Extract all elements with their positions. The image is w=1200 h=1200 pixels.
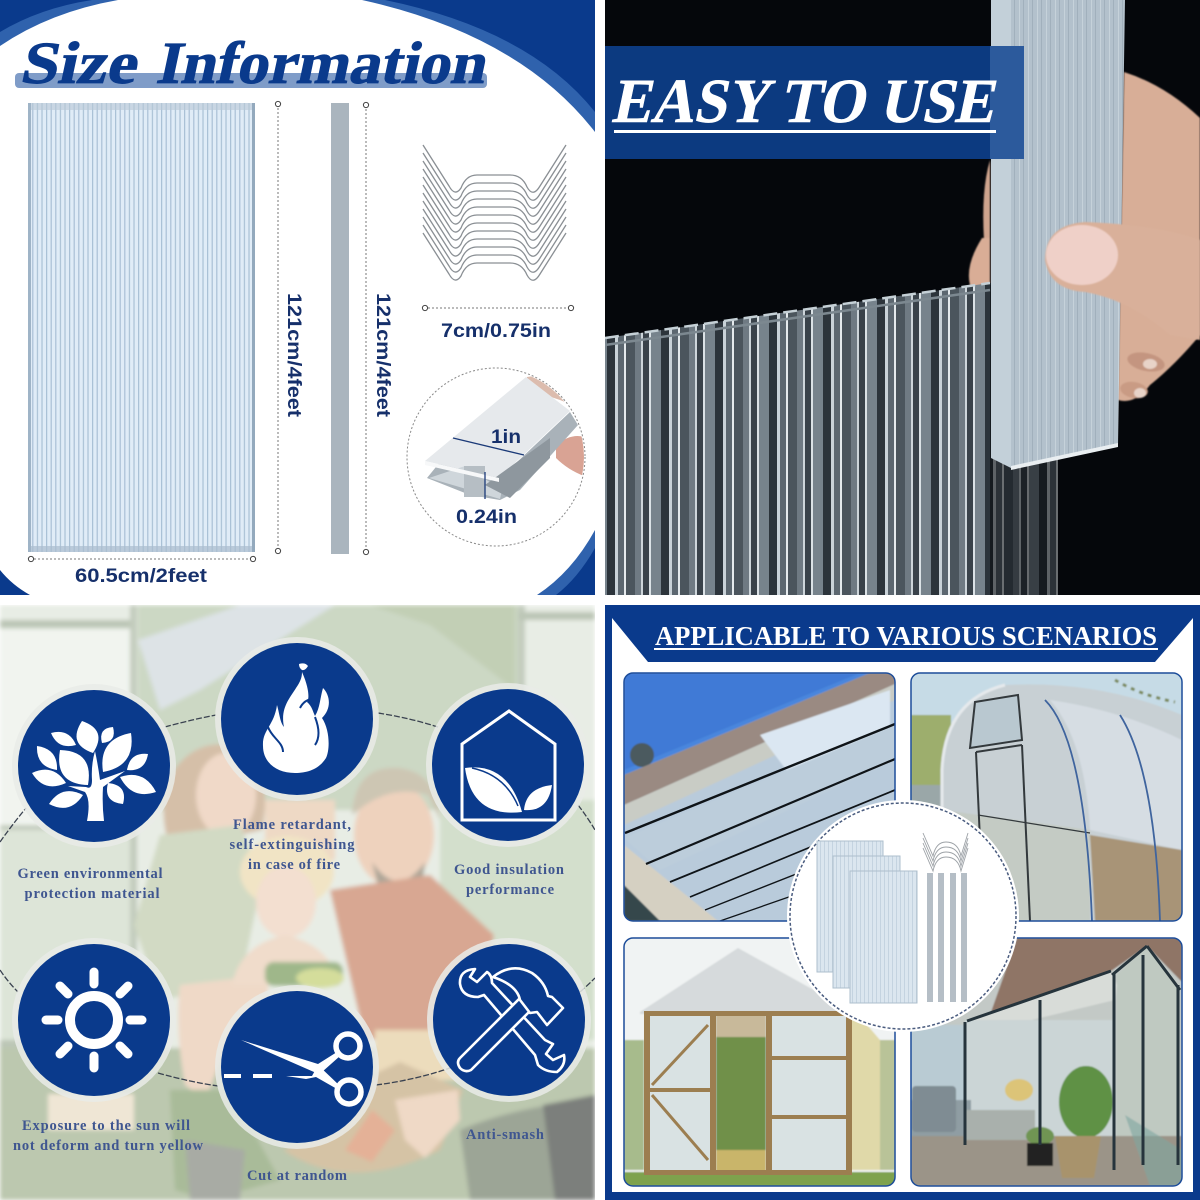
photo: glass conservatory <box>911 938 1182 1186</box>
basket and legs <box>283 1062 463 1172</box>
dimension: sheet width <box>28 556 256 582</box>
heading: Size Information: Size <box>16 31 146 97</box>
four strips <box>927 873 967 1002</box>
H-profile connector strip <box>331 103 349 554</box>
label: flame retardant: Flame retardant, <box>233 817 351 833</box>
label: anti-smash: Anti-smash <box>466 1127 544 1143</box>
photo: roof panels <box>624 673 895 921</box>
corner decoration: bottom left <box>0 570 30 595</box>
dimension: sheet height <box>275 101 304 554</box>
child <box>238 838 335 900</box>
polycarbonate sheet <box>28 103 255 552</box>
icon: hammer and wrench <box>427 938 591 1102</box>
label: green material: Green environmental <box>18 866 162 882</box>
banner: easy to use <box>605 46 1024 159</box>
center circle: product kit <box>787 800 1019 1032</box>
detail circle: connector profile <box>407 368 590 546</box>
dimension: strip height <box>363 102 393 555</box>
panel: easy to use <box>605 0 1200 595</box>
dimension: clip width: 7cm/0.75in <box>441 321 551 342</box>
icon: greenhouse with leaves <box>426 683 590 847</box>
connector dashes <box>0 713 595 1086</box>
panel: applicable scenarios <box>605 605 1200 1200</box>
label: sun resistance: Exposure to the sun will <box>22 1118 190 1134</box>
photo: family in greenhouse <box>0 605 595 1200</box>
mini wire clips <box>923 833 968 871</box>
woman <box>163 744 265 850</box>
label: green material: protection material <box>24 886 160 902</box>
label: insulation: Good insulation <box>454 862 564 878</box>
aluminium H-strip <box>991 0 1125 470</box>
detail circle: connector profile: 1in <box>491 427 521 448</box>
hand <box>969 72 1200 401</box>
photo: arched polytunnel <box>911 673 1182 921</box>
dimension: clip width <box>422 305 574 342</box>
label: insulation: performance <box>466 882 555 898</box>
panel: size information <box>0 0 595 595</box>
corner decoration: top right <box>362 0 595 132</box>
label: cut at random: Cut at random <box>247 1168 347 1184</box>
detail circle: connector profile: 0.24in <box>456 507 517 528</box>
man <box>354 783 434 887</box>
label: flame retardant: in case of fire <box>248 857 341 873</box>
icon: scissors <box>215 985 379 1149</box>
label: insulation <box>454 862 564 898</box>
dimension: strip height: 121cm/4feet <box>372 293 393 418</box>
label: flame retardant <box>230 818 354 869</box>
thumb <box>1045 222 1200 340</box>
corner decoration: top left <box>0 0 118 46</box>
panel: features over family photo <box>0 605 595 1200</box>
dimension: sheet width: 60.5cm/2feet <box>75 566 208 587</box>
photo: wooden greenhouse <box>624 938 895 1186</box>
icon: tree <box>12 684 176 848</box>
banner: easy to use: EASY TO USE <box>608 66 1005 136</box>
wire clips stack <box>423 145 566 280</box>
banner: applicable to various scenarios <box>605 605 1200 662</box>
label: flame retardant: self-extinguishing <box>230 837 355 853</box>
label: sun resistance: not deform and turn yellow <box>13 1138 204 1154</box>
transparent polycarbonate sheet <box>605 283 1100 595</box>
dimension: sheet height: 121cm/4feet <box>283 293 304 418</box>
label: green material <box>18 866 162 902</box>
icon: flame <box>215 637 379 801</box>
heading: Size Information <box>15 40 487 88</box>
heading: Size Information: Information <box>152 31 495 97</box>
three sheets <box>817 841 917 1003</box>
label: sun resistance <box>13 1118 204 1154</box>
corner decoration: bottom right <box>537 530 595 595</box>
banner: applicable to various scenarios: APPLICABLE TO VARIOUS SCENARIOS <box>655 621 1157 651</box>
icon: sun <box>12 938 176 1102</box>
